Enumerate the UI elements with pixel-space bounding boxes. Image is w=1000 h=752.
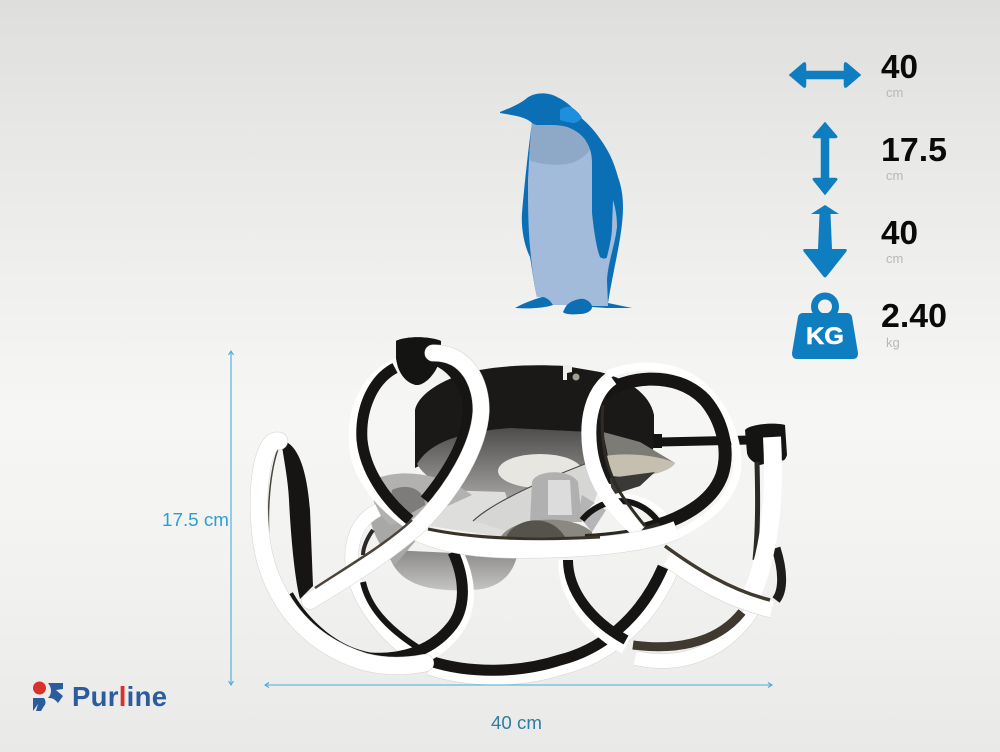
top right loop rim	[608, 367, 737, 537]
knob left front	[396, 337, 441, 385]
fan blade right	[603, 432, 675, 477]
logo icon	[33, 682, 63, 711]
dimension line: height	[228, 351, 234, 685]
icon: drop arrow	[803, 205, 847, 278]
motor housing	[498, 454, 582, 488]
top right loop white band	[589, 378, 645, 532]
logo: Purline: Purline	[72, 681, 167, 712]
bottom right arc	[633, 606, 755, 661]
glass shade	[530, 472, 582, 522]
ceiling bracket notch	[563, 365, 572, 380]
value: width: 40	[881, 48, 918, 85]
top right loop black	[585, 379, 725, 537]
top left loop black	[362, 368, 410, 520]
outer left band white	[259, 441, 425, 666]
lower fan struts	[578, 495, 606, 532]
lower right small loop	[565, 560, 626, 648]
value: drop: 40	[881, 214, 918, 251]
height label: 17.5 cm	[162, 510, 229, 530]
main bottom band	[408, 527, 677, 549]
width label: 40 cm	[491, 713, 542, 733]
right diagonal band	[665, 546, 772, 609]
value: drop: cm	[886, 251, 903, 266]
value: height	[881, 131, 947, 183]
canopy body	[415, 365, 654, 484]
bottom arc	[430, 567, 669, 676]
value: weight	[881, 297, 947, 350]
icon: penguin	[500, 93, 632, 314]
diagonal white band	[310, 353, 481, 601]
penguin chest shade	[529, 123, 590, 165]
icon: height arrow	[813, 122, 837, 195]
inner right small arc	[582, 497, 668, 520]
knob left	[396, 337, 441, 385]
value: height: cm	[886, 168, 903, 183]
lower loop black band	[288, 552, 469, 662]
value: width: cm	[886, 85, 903, 100]
value: weight: kg	[886, 335, 900, 350]
fan blade left	[373, 473, 472, 525]
outer left band black	[268, 440, 313, 599]
dimension line: width	[265, 682, 772, 688]
knob right	[745, 424, 787, 465]
canopy lower shadow	[390, 550, 517, 590]
right vertical strip	[750, 437, 782, 600]
canopy lower disc	[417, 428, 600, 500]
value: height: 17.5	[881, 131, 947, 168]
value: weight: 2.40	[881, 297, 947, 334]
fan blade centre	[473, 462, 602, 532]
icon: width arrow	[789, 62, 861, 88]
lower left small loop	[352, 510, 428, 664]
icon: weight: KG	[806, 323, 844, 350]
penguin neck highlight	[560, 107, 582, 123]
penguin belly	[528, 123, 617, 306]
top left inner black	[425, 360, 468, 500]
top left loop rim	[353, 362, 408, 525]
rod	[660, 440, 750, 442]
icon: weight	[792, 296, 858, 359]
lamp product image	[259, 337, 787, 676]
